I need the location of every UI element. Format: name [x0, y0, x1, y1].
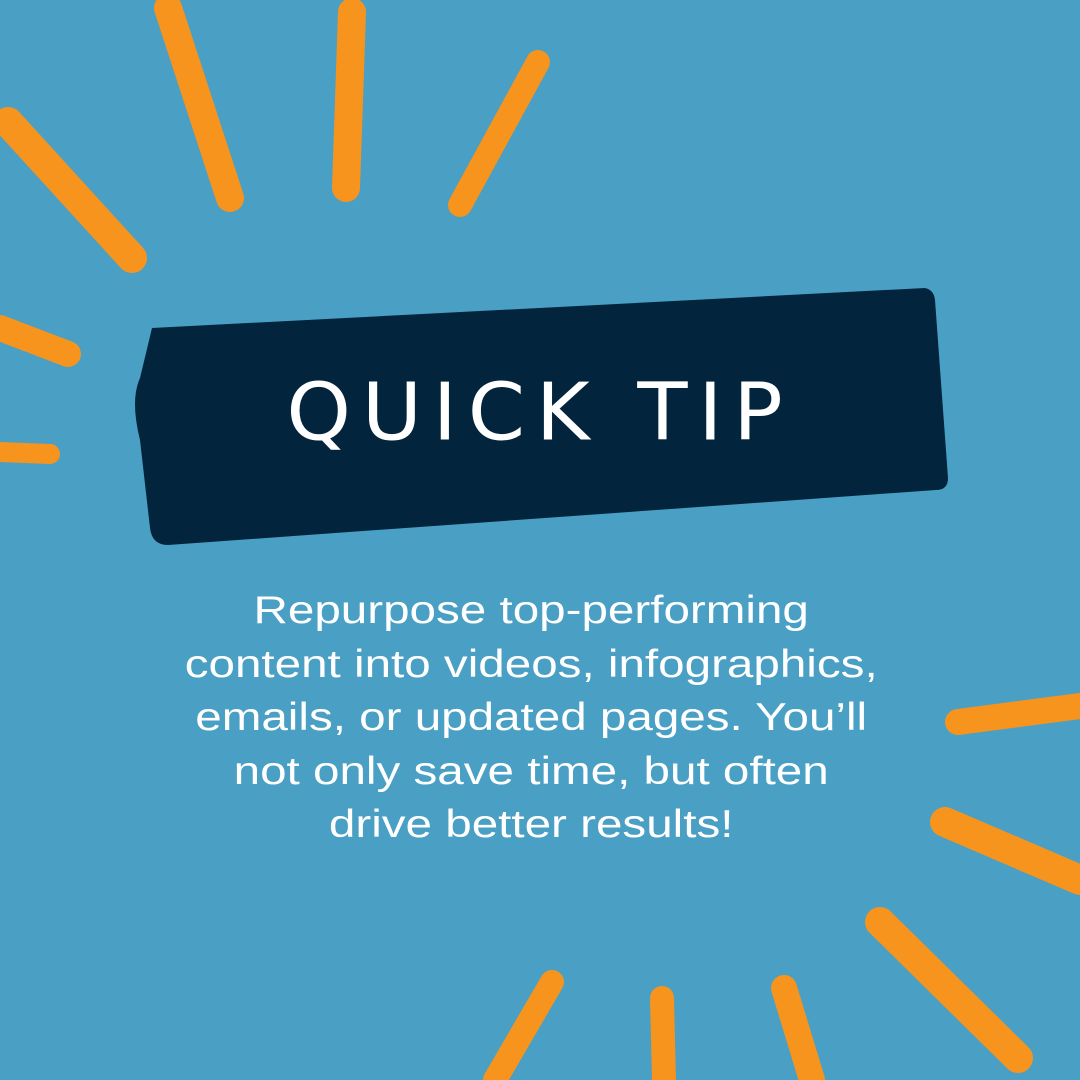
text block: tip body: not only save time, but often [234, 750, 829, 792]
banner: dark navy brush shape [135, 288, 948, 545]
title: QUICK TIP: QUICK TIP [286, 365, 794, 458]
rays: top-left burst [0, 8, 538, 454]
text block: tip body: Repurpose top-performing [253, 589, 809, 632]
rays: bottom-right burst [495, 706, 1080, 1080]
text block: tip body [185, 589, 878, 846]
text block: tip body: emails, or updated pages. You’ll [195, 696, 867, 739]
text block: tip body: content into videos, infographics, [185, 642, 878, 686]
text block: tip body: drive better results! [329, 803, 733, 846]
